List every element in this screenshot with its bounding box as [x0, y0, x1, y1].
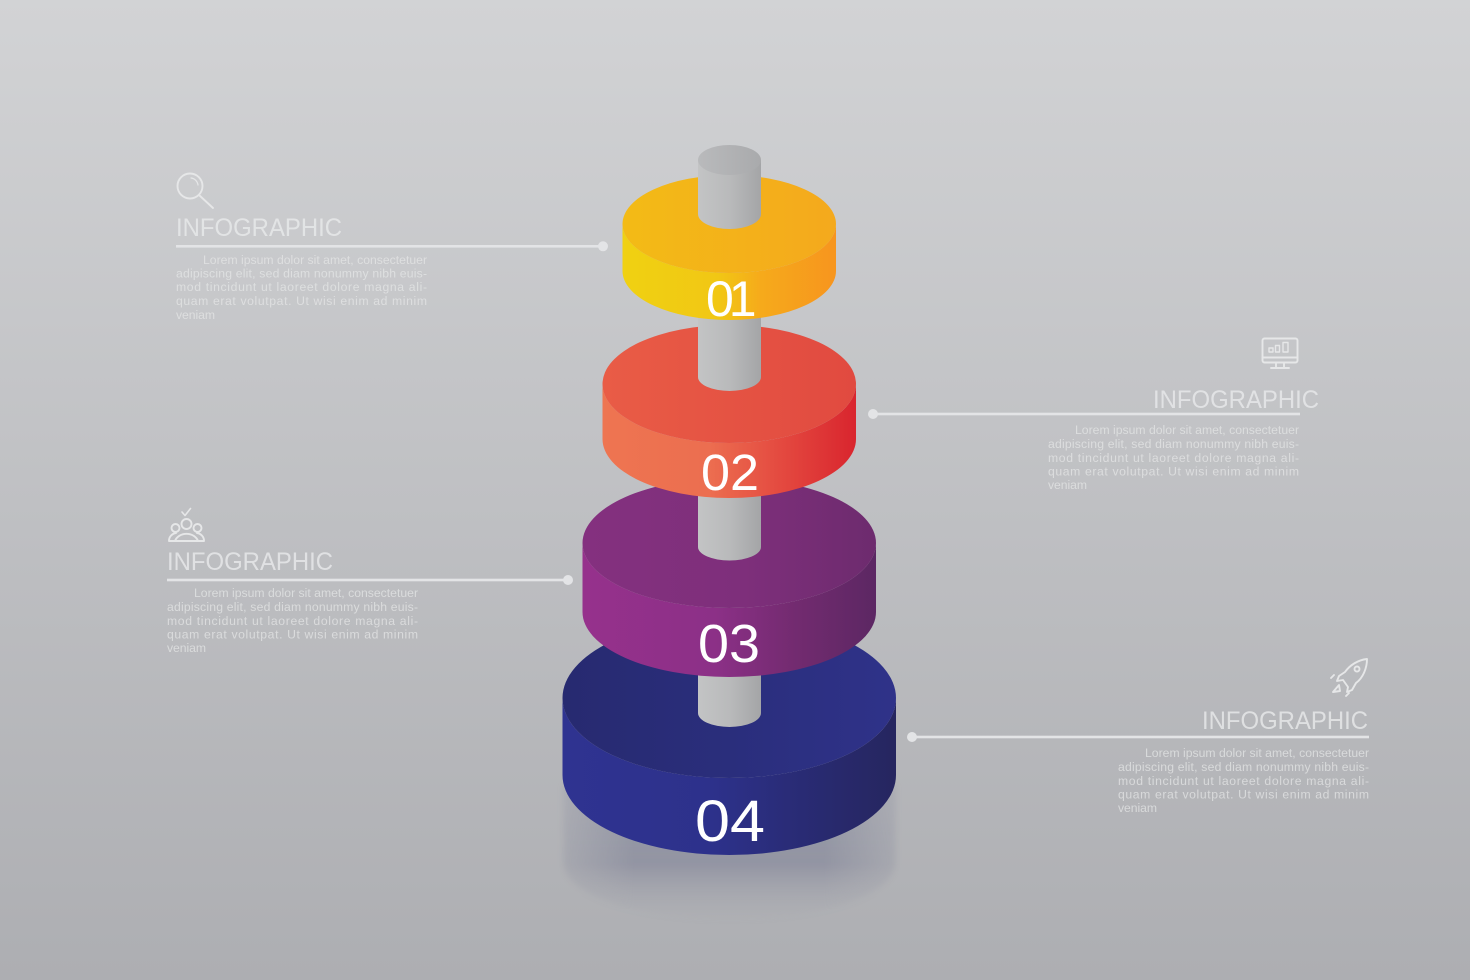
disk reflection	[564, 792, 894, 897]
body text 4: veniam	[1118, 801, 1157, 815]
shaft top segment	[698, 145, 761, 229]
disk 02	[602, 325, 856, 498]
body text 1: adipiscing elit, sed diam nonummy nibh euis-	[176, 266, 427, 280]
heading 2: INFOGRAPHIC	[1153, 386, 1319, 414]
number 01: 01	[706, 271, 755, 327]
body text 2: Lorem ipsum dolor sit amet, consectetuer	[1075, 423, 1299, 437]
body text 4: quam erat volutpat. Ut wisi enim ad minim	[1118, 788, 1369, 802]
body text 4: mod tincidunt ut laoreet dolore magna ali-	[1118, 774, 1369, 788]
disk 03	[582, 478, 876, 677]
heading 4: INFOGRAPHIC	[1202, 707, 1368, 735]
body text 3: adipiscing elit, sed diam nonummy nibh euis-	[167, 600, 418, 614]
body text 1: quam erat volutpat. Ut wisi enim ad minim	[176, 294, 427, 308]
heading 1: INFOGRAPHIC	[176, 214, 342, 242]
body text 3	[167, 586, 418, 655]
icon: rocket	[1331, 659, 1367, 696]
body text 2: adipiscing elit, sed diam nonummy nibh euis-	[1048, 437, 1299, 451]
body text 4: Lorem ipsum dolor sit amet, consectetuer	[1145, 746, 1369, 760]
panel: step 3 text	[167, 508, 573, 655]
number 03: 03	[698, 614, 760, 674]
body text 1: veniam	[176, 308, 215, 322]
icon: computer monitor	[1262, 338, 1298, 368]
number 02: 02	[701, 444, 759, 501]
shaft segment 3	[698, 470, 761, 560]
body text 3: quam erat volutpat. Ut wisi enim ad minim	[167, 628, 418, 642]
body text 3: mod tincidunt ut laoreet dolore magna ali-	[167, 614, 418, 628]
body text 2: veniam	[1048, 478, 1087, 492]
icon: team with check mark	[169, 508, 204, 541]
panel: step 2 text	[868, 338, 1319, 492]
connector 4	[907, 732, 1369, 742]
body text 1	[176, 253, 427, 322]
number 04: 04	[695, 789, 765, 854]
disk 01	[622, 175, 836, 320]
shaft segment 2	[698, 300, 761, 391]
body text 2: quam erat volutpat. Ut wisi enim ad minim	[1048, 464, 1299, 478]
panel: step 4 text	[907, 659, 1369, 815]
body text 4	[1118, 746, 1369, 815]
panel: step 1 text	[176, 174, 608, 322]
heading 3: INFOGRAPHIC	[167, 548, 333, 576]
body text 4: adipiscing elit, sed diam nonummy nibh euis-	[1118, 760, 1369, 774]
body text 3: Lorem ipsum dolor sit amet, consectetuer	[194, 586, 418, 600]
connector 2	[868, 409, 1300, 419]
disk 04	[562, 618, 896, 855]
body text 2	[1048, 423, 1299, 492]
connector 3	[167, 575, 573, 585]
body text 1: Lorem ipsum dolor sit amet, consectetuer	[203, 253, 427, 267]
icon: magnifying glass	[178, 174, 213, 208]
body text 1: mod tincidunt ut laoreet dolore magna ali-	[176, 280, 427, 294]
body text 3: veniam	[167, 641, 206, 655]
body text 2: mod tincidunt ut laoreet dolore magna ali-	[1048, 451, 1299, 465]
shaft segment 4	[698, 640, 761, 727]
connector 1	[176, 241, 608, 251]
